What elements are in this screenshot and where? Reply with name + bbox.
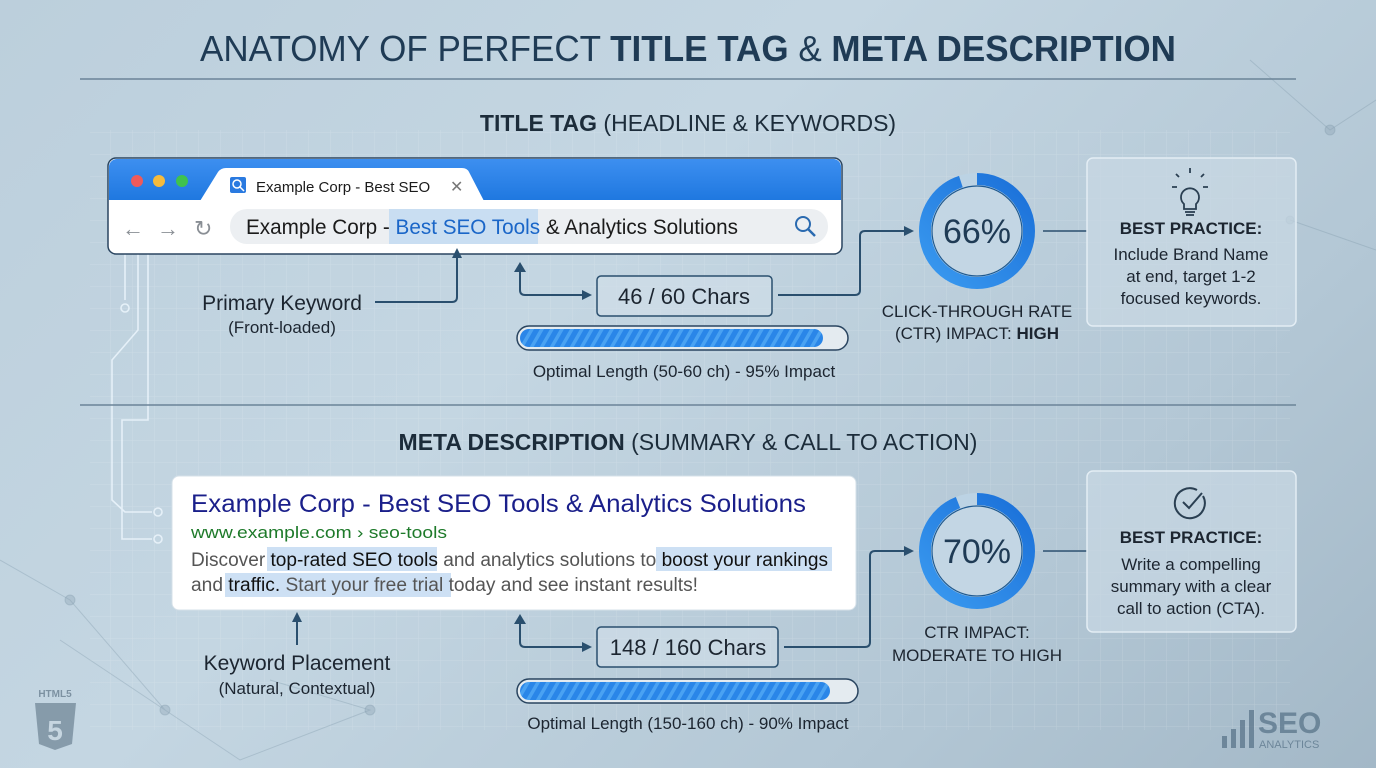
gauge: 70%: 70% — [943, 533, 1011, 571]
progress bar 2 — [517, 679, 858, 703]
heading: title tag section: TITLE TAG (HEADLINE & KEYWORDS) — [480, 110, 896, 136]
address bar — [230, 209, 828, 244]
SERP snippet card: and traffic. Start your free trial today and see instant results! — [191, 575, 698, 596]
browser window: ← — [122, 216, 144, 241]
connector to gauge — [778, 231, 912, 295]
title: ANATOMY OF PERFECT TITLE TAG & META DESCRIPTION — [200, 28, 1176, 69]
char count box 2: 148 / 160 Chars — [610, 635, 766, 660]
caption: CTR high: (CTR) IMPACT: HIGH — [895, 324, 1059, 343]
gauge: 66% — [925, 179, 1029, 283]
heading: meta description section: META DESCRIPTION (SUMMARY & CALL TO ACTION) — [399, 429, 977, 455]
SERP snippet card: Discover top-rated SEO tools and analytics solutions to boost your rankings — [191, 550, 828, 571]
best practice box 2: call to action (CTA). — [1117, 599, 1265, 618]
progress bar — [517, 326, 848, 350]
logo: SEO Analytics — [1222, 707, 1321, 751]
SERP snippet card — [172, 476, 856, 610]
annotation: keyword placement — [204, 614, 391, 698]
browser window — [108, 158, 842, 254]
SERP snippet card: Example Corp - Best SEO Tools & Analytics Solutions — [191, 490, 806, 518]
SERP snippet card: www.example.com › seo-tools — [190, 523, 447, 542]
caption: CTR high — [882, 302, 1072, 343]
icon: lightbulb — [1172, 168, 1208, 215]
gauge: 70% — [925, 499, 1029, 603]
browser window: ↻ — [194, 216, 212, 241]
best practice box 1: focused keywords. — [1121, 289, 1261, 308]
annotation: keyword placement: Keyword Placement — [204, 652, 391, 675]
caption: CTR moderate: CTR IMPACT: — [924, 623, 1030, 642]
browser tab: ✕ — [450, 179, 463, 196]
char count box — [597, 276, 772, 316]
best practice box 1: at end, target 1-2 — [1126, 267, 1256, 286]
caption: optimal length 2: Optimal Length (150-160 ch) - 90% Impact — [527, 714, 849, 733]
best practice box 2: Write a compelling — [1121, 555, 1261, 574]
icon: check circle — [1175, 488, 1205, 518]
caption: optimal length: Optimal Length (50-60 ch) - 95% Impact — [533, 362, 835, 381]
best practice box 1 — [1087, 158, 1296, 326]
annotation: primary keyword: Primary Keyword — [202, 292, 362, 315]
annotation: primary keyword: (Front-loaded) — [228, 318, 336, 337]
connector to gauge 2 — [784, 551, 912, 647]
gauge: 66%: 66% — [943, 213, 1011, 251]
address bar: Example Corp - Best SEO Tools & Analytics Solutions — [246, 216, 738, 239]
logo: SEO Analytics: ANALYTICS — [1259, 739, 1319, 751]
arrow: length connector 2 — [514, 614, 590, 647]
char count box: 46 / 60 Chars — [618, 284, 750, 309]
char count box 2 — [597, 627, 778, 667]
browser window: → — [157, 216, 179, 241]
circuit lines — [112, 254, 162, 543]
annotation: keyword placement: (Natural, Contextual) — [219, 679, 375, 698]
logo: HTML5: HTML5 — [38, 689, 72, 700]
caption: CTR high: CLICK-THROUGH RATE — [882, 302, 1072, 321]
best practice box 2 — [1087, 471, 1296, 632]
annotation: primary keyword — [202, 250, 457, 337]
caption: CTR moderate — [892, 623, 1062, 665]
best practice box 2: summary with a clear — [1111, 577, 1272, 596]
logo: SEO Analytics: SEO — [1258, 707, 1321, 740]
browser tab — [200, 168, 484, 201]
browser tab: Example Corp - Best SEO — [256, 179, 430, 196]
caption: CTR moderate: MODERATE TO HIGH — [892, 646, 1062, 665]
logo: HTML5 — [35, 689, 76, 750]
logo: HTML5: 5 — [47, 715, 63, 746]
arrow: length connector — [514, 262, 590, 295]
best practice box 2: BEST PRACTICE: — [1120, 528, 1262, 547]
best practice box 1: BEST PRACTICE: — [1120, 219, 1262, 238]
best practice box 1: Include Brand Name — [1114, 245, 1268, 264]
